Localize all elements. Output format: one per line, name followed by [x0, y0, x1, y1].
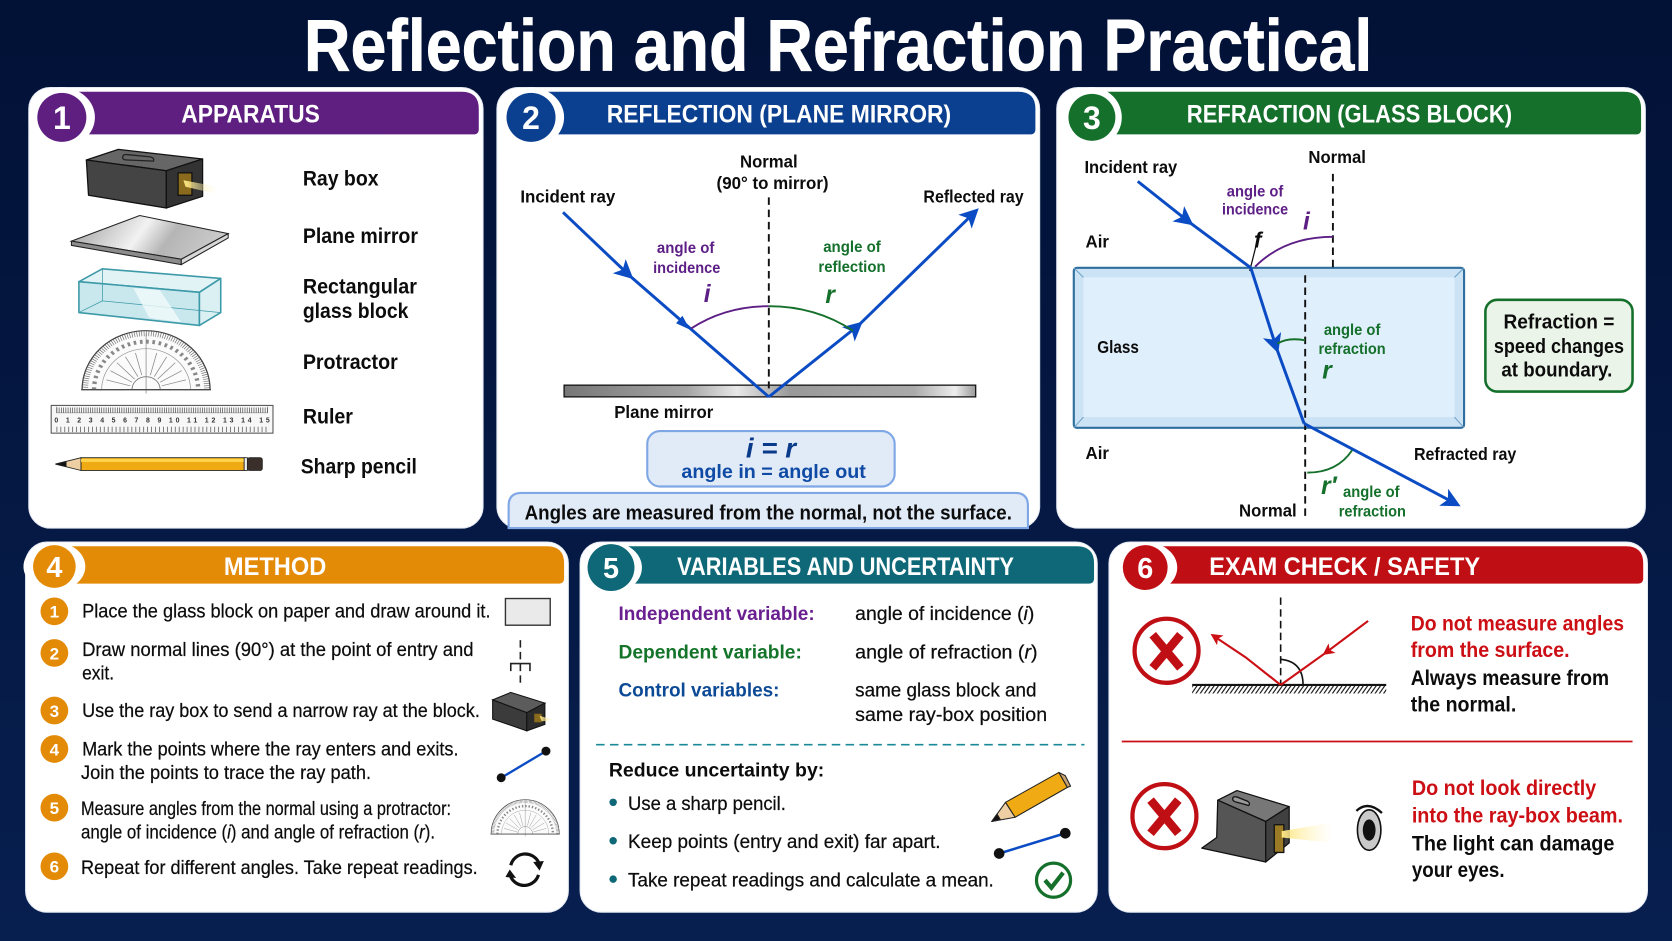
icon: cross mark — [1135, 619, 1199, 683]
reflection labels: Normal — [740, 151, 798, 172]
icon: ruler: 0 1 2 3 4 5 6 7 8 9 10 11 12 13 14 15 — [54, 417, 270, 424]
apparatus header bar: APPARATUS — [181, 102, 320, 129]
apparatus labels: Sharp pencil — [301, 456, 417, 479]
refraction labels: refraction — [1319, 341, 1386, 358]
step 1 — [41, 597, 550, 625]
step 5: 5 — [50, 799, 59, 818]
refraction labels: Glass — [1097, 337, 1139, 357]
apparatus header bar — [29, 87, 479, 147]
refraction labels: Normal — [1239, 500, 1297, 520]
angle labels: angle of — [657, 240, 715, 257]
reflected ray — [769, 212, 975, 397]
icon: eye — [1356, 806, 1382, 850]
icon: ray box — [86, 149, 218, 208]
panel: refraction — [1057, 87, 1645, 528]
step 5 — [41, 794, 560, 844]
icon: plane mirror — [71, 216, 228, 265]
refraction labels: Incident ray — [1084, 157, 1177, 177]
apparatus labels: Plane mirror — [303, 225, 418, 248]
angle labels: i — [704, 281, 712, 308]
refraction labels: r′ — [1321, 473, 1338, 500]
warning text: ray box beam: The light can damage — [1412, 831, 1615, 855]
warning text: ray box beam: Do not look directly — [1412, 776, 1596, 800]
angle labels: r — [825, 282, 836, 309]
apparatus labels: Ray box — [303, 168, 379, 191]
refraction labels: Air — [1086, 232, 1109, 252]
warning text: ray box beam: your eyes. — [1412, 858, 1505, 882]
variables header bar — [580, 542, 1094, 593]
step 3: Use the ray box to send a narrow ray at the block. — [82, 701, 480, 722]
warning text: ray box beam — [1412, 776, 1623, 882]
refraction header bar — [1062, 87, 1641, 147]
variable definitions: Independent variable: — [618, 604, 815, 625]
callout: refraction definition — [1485, 300, 1633, 392]
method header bar: 4 — [46, 552, 62, 584]
step 6 — [41, 852, 544, 885]
variable definitions: Control variables: — [618, 681, 779, 702]
reflection labels: Plane mirror — [614, 402, 714, 422]
step 4: Join the points to trace the ray path. — [81, 763, 371, 784]
reflection labels — [520, 151, 1024, 422]
icon: protractor — [81, 331, 211, 394]
variable definitions — [618, 604, 1047, 726]
warning text: measure from normal: the normal. — [1411, 693, 1516, 717]
refraction labels: Refracted ray — [1414, 444, 1517, 464]
panel: apparatus — [29, 87, 483, 528]
step 3: 3 — [50, 702, 59, 721]
icon: ruler — [51, 405, 273, 433]
variables header bar: VARIABLES AND UNCERTAINTY — [677, 554, 1014, 581]
incorrect angle diagram — [1192, 597, 1386, 693]
callout: refraction definition: Refraction = — [1504, 312, 1614, 334]
step 3 — [41, 692, 556, 731]
refraction labels: refraction — [1339, 503, 1406, 520]
variable definitions: Dependent variable: — [618, 642, 802, 663]
warning text: measure from normal: from the surface. — [1411, 638, 1570, 662]
step 2: 2 — [50, 644, 59, 663]
icon: cross mark — [1132, 784, 1196, 848]
callout: i = r: i = r — [746, 433, 798, 464]
reduce uncertainty list: Use a sharp pencil. — [628, 794, 786, 815]
glass block — [1074, 268, 1464, 428]
variable definitions: angle of incidence (i) — [855, 604, 1034, 625]
exam check header bar — [1113, 542, 1643, 593]
reflection labels: (90° to mirror) — [717, 173, 829, 193]
reduce uncertainty list: Keep points (entry and exit) far apart. — [628, 832, 940, 853]
step 4 — [41, 735, 550, 784]
angle labels: incidence — [653, 260, 720, 277]
incident ray — [563, 212, 769, 397]
icon: check mark — [1036, 863, 1071, 897]
method header bar — [23, 542, 564, 591]
warning text: measure from normal: Always measure from — [1411, 666, 1609, 690]
apparatus labels: glass block — [303, 300, 409, 323]
refraction labels: Normal — [1308, 147, 1366, 167]
step 5: angle of incidence (i) and angle of refraction (r). — [81, 823, 435, 844]
refraction labels: f — [1254, 228, 1264, 253]
plane mirror — [564, 385, 976, 397]
reflection labels: Reflected ray — [923, 187, 1024, 207]
refraction labels: angle of — [1227, 183, 1284, 200]
callout: refraction definition: at boundary. — [1501, 360, 1612, 382]
panel: method — [23, 542, 568, 912]
step 4: Mark the points where the ray enters and exits. — [82, 739, 459, 760]
refraction labels: r — [1322, 358, 1333, 385]
exam check header bar: 6 — [1137, 553, 1153, 585]
warning text: ray box beam: into the ray-box beam. — [1412, 804, 1623, 828]
title: Reflection and Refraction Practical — [304, 3, 1372, 86]
angle labels — [653, 239, 886, 309]
step 2: Draw normal lines (90°) at the point of entry and — [82, 640, 473, 661]
panel: variables and uncertainty — [580, 542, 1097, 912]
apparatus labels: Rectangular — [303, 275, 417, 298]
exam check header bar: EXAM CHECK / SAFETY — [1209, 554, 1480, 581]
variable definitions: same ray-box position — [855, 705, 1047, 726]
refraction header bar: REFRACTION (GLASS BLOCK) — [1187, 102, 1512, 129]
refraction labels: i — [1303, 208, 1311, 235]
warning text: measure from normal — [1411, 612, 1624, 717]
refraction rays — [1138, 181, 1456, 504]
step 6: 6 — [50, 858, 59, 877]
variables header bar: 5 — [603, 553, 619, 585]
method header bar: METHOD — [224, 554, 326, 581]
step 1: Place the glass block on paper and draw around it. — [82, 602, 491, 623]
refraction labels — [1084, 147, 1517, 520]
callout: measured from normal: Angles are measured from the normal, not the surface. — [525, 503, 1012, 525]
variable definitions: same glass block and — [855, 681, 1036, 702]
callout: i = r — [647, 431, 895, 487]
angle arcs — [691, 306, 853, 331]
reflection header bar: 2 — [522, 100, 540, 136]
icon: entry and exit points — [994, 828, 1071, 859]
warning text: measure from normal: Do not measure angles — [1411, 612, 1624, 636]
apparatus labels — [301, 168, 418, 479]
angle arcs — [1255, 237, 1352, 473]
step 6: Repeat for different angles. Take repeat readings. — [81, 858, 478, 879]
apparatus header bar: 1 — [53, 100, 71, 136]
variable definitions: angle of refraction (r) — [855, 642, 1038, 663]
reflection labels: Incident ray — [520, 187, 615, 207]
step 1: 1 — [50, 603, 59, 622]
step 2 — [41, 639, 530, 685]
callout: refraction definition: speed changes — [1494, 336, 1624, 358]
refraction header bar: 3 — [1083, 100, 1101, 136]
refraction labels: angle of — [1324, 322, 1381, 339]
apparatus labels: Ruler — [303, 406, 353, 429]
reflection header bar — [498, 87, 1035, 147]
apparatus labels: Protractor — [303, 351, 398, 374]
angle labels: angle of — [823, 239, 881, 256]
step 5: Measure angles from the normal using a protractor: — [81, 799, 451, 820]
icon: pencil — [992, 772, 1071, 822]
callout: i = r: angle in = angle out — [681, 461, 866, 483]
refraction labels: incidence — [1222, 201, 1288, 218]
icon: ray box with beam — [1202, 791, 1333, 862]
reduce uncertainty list: Take repeat readings and calculate a mean. — [628, 871, 994, 892]
refraction labels: Air — [1086, 443, 1109, 463]
angle labels: reflection — [818, 259, 886, 276]
icon: pencil — [55, 458, 262, 470]
normal lines — [1250, 174, 1333, 520]
step 2: exit. — [82, 664, 114, 685]
reduce uncertainty list: Reduce uncertainty by: — [609, 760, 824, 782]
panel: exam check and safety — [1109, 542, 1647, 912]
reduce uncertainty list — [609, 760, 994, 892]
panel: reflection — [497, 87, 1040, 528]
normal line — [768, 197, 770, 388]
step 4: 4 — [50, 740, 60, 759]
icon: glass block — [79, 269, 221, 325]
callout: measured from normal — [509, 493, 1028, 528]
refraction labels: angle of — [1343, 484, 1400, 501]
reflection header bar: REFLECTION (PLANE MIRROR) — [607, 102, 951, 129]
